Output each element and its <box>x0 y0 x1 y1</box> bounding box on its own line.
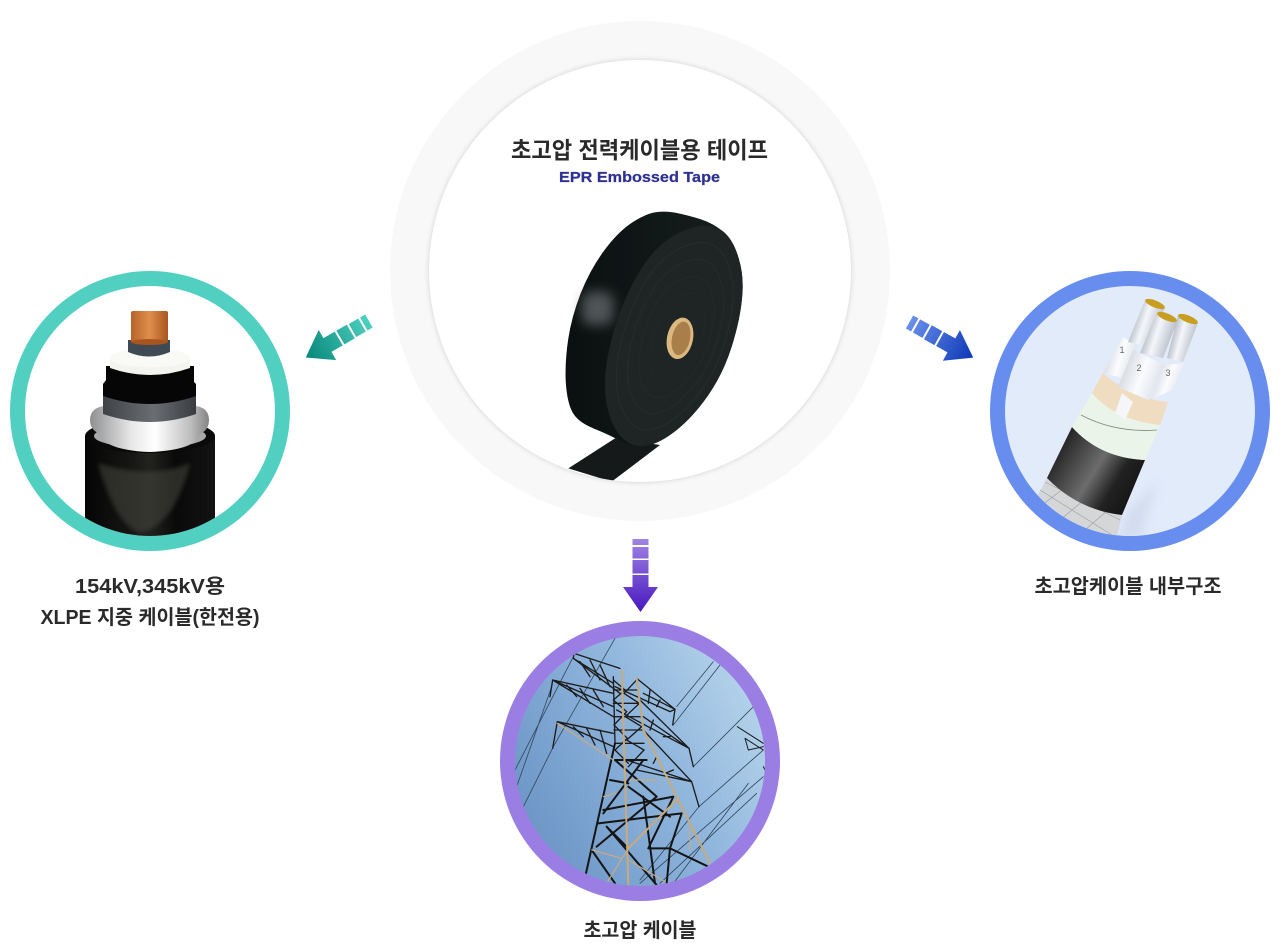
image: cable cross section: 3 <box>1165 368 1171 378</box>
panel: XLPE cable circle <box>10 271 290 551</box>
label: XLPE cable: XLPE 지중 케이블(한전용) <box>40 606 260 629</box>
label: internal structure: 초고압케이블 내부구조 <box>1034 575 1222 598</box>
arrow: purple downward <box>623 539 658 612</box>
panel: center tape circle <box>424 56 856 486</box>
arrow: blue to right <box>901 307 982 373</box>
label: high-voltage cable: 초고압 케이블 <box>584 919 696 942</box>
image: cable cross section <box>1030 297 1199 540</box>
arrow: teal to left <box>297 306 378 373</box>
image: cable cross section: 2 <box>1136 363 1142 373</box>
title: 초고압 전력케이블용 테이프 <box>511 137 768 163</box>
label: XLPE cable <box>40 575 260 629</box>
image: XLPE underground cable <box>85 311 215 546</box>
panel: internal structure circle <box>990 271 1270 551</box>
image: cable cross section: 1 <box>1119 345 1125 355</box>
subtitle: EPR Embossed Tape <box>559 169 720 186</box>
panel: transmission tower circle <box>500 621 780 901</box>
image: tape roll <box>566 212 743 482</box>
label: XLPE cable: 154kV,345kV용 <box>75 575 225 598</box>
three insulated cores <box>1103 337 1137 380</box>
image: transmission tower <box>515 638 765 885</box>
